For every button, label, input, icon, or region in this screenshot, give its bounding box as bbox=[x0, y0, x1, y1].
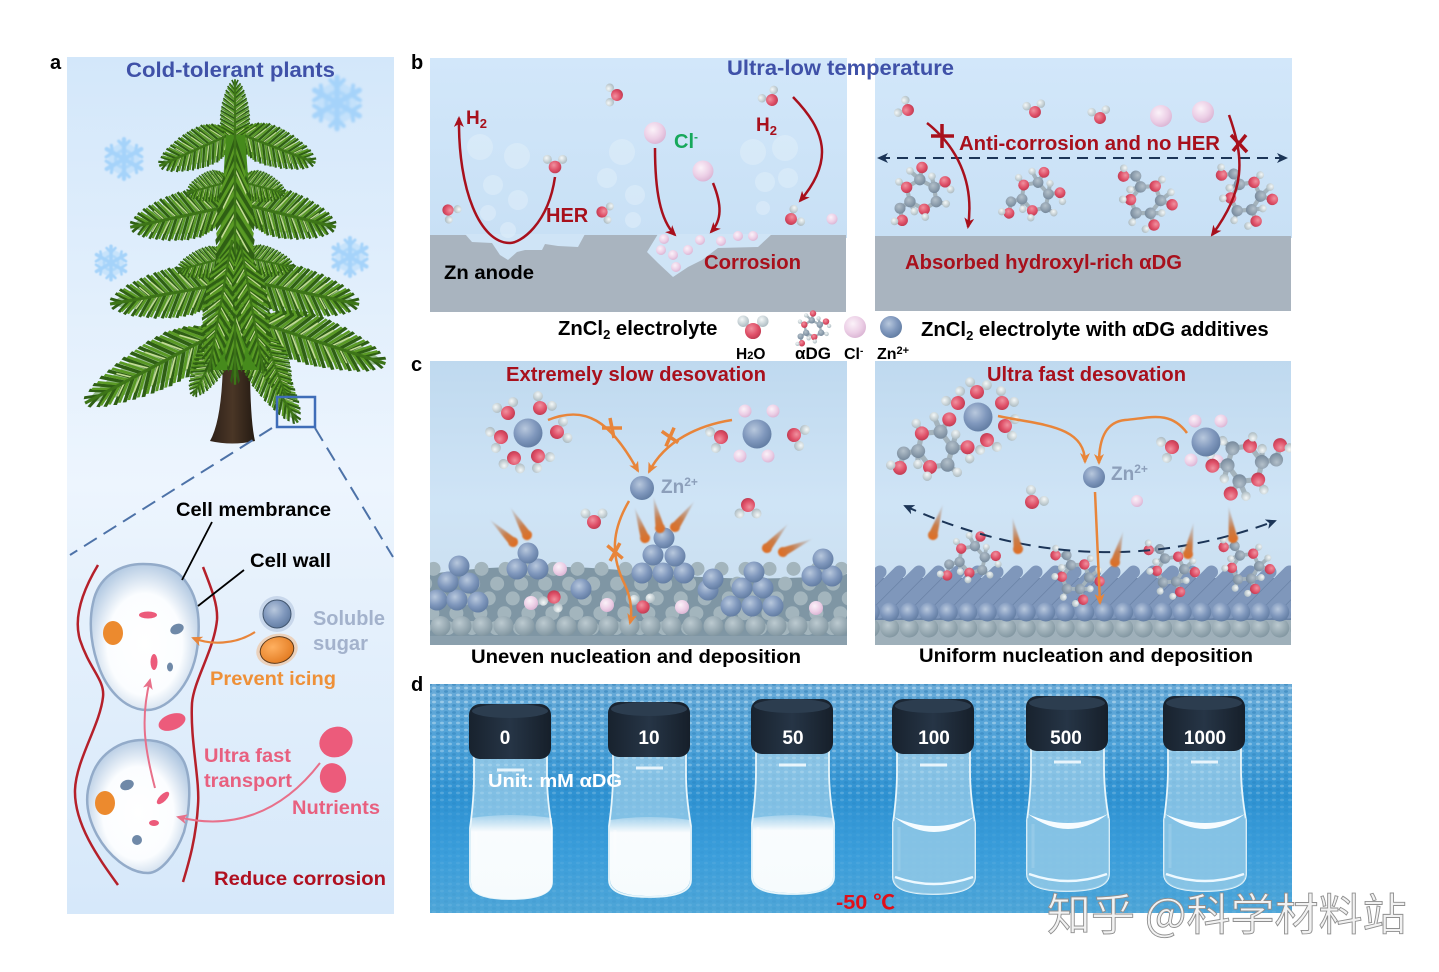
solvated Zn cluster with water bbox=[484, 389, 574, 475]
heading: Ultra-low temperature: Ultra-low temperature bbox=[727, 57, 954, 80]
label: Nutrients: Nutrients bbox=[292, 798, 380, 819]
vial 500 bbox=[1026, 696, 1109, 891]
panel b right: with aDG additive bbox=[875, 58, 1292, 311]
zinc anode with adsorbed layer bbox=[875, 236, 1291, 311]
label: Soluble sugar: Soluble bbox=[313, 608, 385, 630]
vial 0: 0 bbox=[500, 728, 510, 749]
legend: Zn2+: 2+ bbox=[897, 345, 909, 357]
label: Cl-: Cl bbox=[674, 131, 694, 153]
chloride ions bbox=[644, 122, 838, 272]
legend: H2O bbox=[736, 315, 769, 363]
faint bubbles bbox=[467, 134, 798, 238]
label: -50 C: -50 ℃ bbox=[836, 892, 895, 914]
vial 1000 bbox=[1163, 696, 1246, 891]
central Zn ion bbox=[630, 476, 654, 500]
legend bbox=[736, 310, 909, 363]
vial 100 bbox=[892, 699, 975, 894]
panel c left: uneven deposition bbox=[430, 361, 847, 645]
legend: Cl-: - bbox=[860, 346, 863, 357]
label: Cell wall: Cell wall bbox=[250, 551, 331, 572]
label: Absorbed hydroxyl-rich aDG: Absorbed hydroxyl-rich αDG bbox=[905, 252, 1182, 274]
vial 500: 500 bbox=[1050, 728, 1082, 749]
caption: Uniform nucleation and deposition: Uniform nucleation and deposition bbox=[919, 645, 1253, 667]
caption: ZnCl2 electrolyte with aDG additives: 2 bbox=[966, 328, 973, 343]
label: Cl-: - bbox=[694, 130, 698, 144]
label: Cell membrance: Cell membrance bbox=[176, 500, 331, 521]
label: H2 right: H bbox=[756, 115, 770, 136]
dashed guide curve bbox=[905, 506, 1275, 552]
label: Anti-corrosion and no HER: Anti-corrosion and no HER bbox=[959, 133, 1221, 155]
surface chloride and water bbox=[524, 562, 823, 615]
panel letter d: d bbox=[411, 674, 423, 696]
label: H2 right: 2 bbox=[770, 123, 777, 138]
dashed barrier bbox=[879, 157, 1286, 159]
deposited zinc pyramids bbox=[426, 528, 842, 616]
label: Prevent icing: Prevent icing bbox=[210, 669, 336, 690]
corrosion pits bbox=[465, 234, 772, 277]
icon: snowflakes bbox=[96, 77, 367, 280]
adsorbed aDG on surface bbox=[936, 531, 1276, 607]
legend: H2O: H2O bbox=[736, 346, 765, 363]
vial 50: 50 bbox=[782, 728, 804, 749]
label: Unit mM aDG: Unit: mM αDG bbox=[488, 771, 622, 791]
illustration: fir tree bbox=[73, 79, 393, 444]
free water bbox=[580, 498, 762, 529]
central Zn ion bbox=[1083, 466, 1105, 488]
panel b left: ZnCl2 electrolyte bbox=[430, 58, 847, 312]
label: H2 left: H bbox=[466, 108, 480, 129]
orange ion comets bbox=[487, 496, 814, 559]
legend: Zn2+: Zn bbox=[877, 346, 897, 363]
cell wall curves bbox=[75, 565, 217, 885]
orange ion comets bbox=[927, 503, 1239, 568]
title: Ultra fast desovation: Ultra fast desovation bbox=[987, 364, 1186, 386]
legend: Zn2+ bbox=[877, 316, 909, 363]
water and chloride bbox=[892, 94, 1214, 127]
label: Soluble sugar: sugar bbox=[313, 633, 368, 655]
label: Zn2+: 2+ bbox=[684, 475, 698, 489]
legend: aDG: αDG bbox=[795, 344, 831, 363]
upper plant cell bbox=[91, 564, 199, 710]
legend: Cl-: Cl bbox=[844, 346, 860, 363]
arrow: nutrients into cell bbox=[178, 763, 320, 821]
blocked arrows bbox=[927, 115, 1247, 235]
label: H2 left: 2 bbox=[480, 116, 487, 131]
solvated Zn cluster with chloride bbox=[704, 404, 811, 462]
label: Zn2+: 2+ bbox=[1134, 462, 1148, 476]
zinc anode bbox=[430, 235, 846, 312]
leader lines bbox=[182, 522, 244, 606]
panel a: cold-tolerant plants bbox=[50, 52, 394, 914]
panel letter c: c bbox=[411, 354, 422, 376]
panel letter b: b bbox=[411, 52, 423, 74]
vial 1000: 1000 bbox=[1184, 728, 1226, 749]
reaction arrows bbox=[459, 97, 822, 243]
label: Zn anode: Zn anode bbox=[444, 263, 534, 284]
title: Extremely slow desovation: Extremely slow desovation bbox=[506, 364, 766, 386]
desolvation arrows bbox=[998, 416, 1187, 603]
caption: Uneven nucleation and deposition: Uneven nucleation and deposition bbox=[471, 646, 801, 668]
icon: nutrients bbox=[314, 721, 358, 796]
vial 0 bbox=[469, 704, 552, 899]
blocked crosses bbox=[601, 418, 684, 566]
zoom box on branch tip bbox=[277, 397, 315, 427]
vial 10 bbox=[608, 702, 691, 897]
label: Ultra fast transport bbox=[204, 746, 293, 792]
arrow: sugar into cell bbox=[193, 632, 255, 643]
arrow: transport between cells bbox=[145, 680, 155, 788]
vial 100: 100 bbox=[918, 728, 950, 749]
label: Zn2+: Zn bbox=[661, 477, 684, 498]
label: Ultra fast transport: transport bbox=[204, 771, 293, 792]
solvated Zn with water and aDG bbox=[886, 377, 1020, 481]
vial 10: 10 bbox=[638, 728, 660, 749]
legend: aDG bbox=[795, 310, 831, 363]
label: Reduce corrosion: Reduce corrosion bbox=[214, 869, 386, 890]
zoom guide lines bbox=[70, 428, 393, 557]
solvated Zn with chloride and aDG bbox=[1156, 414, 1291, 501]
lower plant cell bbox=[87, 740, 189, 873]
panel d: vial photo bbox=[430, 684, 1292, 914]
panel letter a: a bbox=[50, 52, 62, 74]
watermark: 知乎 @科学材料站 bbox=[1047, 879, 1406, 943]
vial 50 bbox=[751, 699, 834, 894]
heading: Cold-tolerant plants: Cold-tolerant plants bbox=[126, 59, 335, 82]
label: Ultra fast transport: Ultra fast bbox=[204, 746, 292, 767]
legend: Cl- bbox=[844, 316, 866, 363]
pink vesicle between cells bbox=[156, 710, 188, 734]
label: Zn2+: Zn bbox=[1111, 464, 1134, 485]
gray substrate bbox=[400, 566, 866, 645]
caption: ZnCl2 electrolyte with aDG additives: ZnCl bbox=[921, 319, 966, 341]
caption: ZnCl2 electrolyte: electrolyte bbox=[610, 318, 717, 340]
panel c right: uniform deposition bbox=[875, 361, 1291, 645]
zinc rods substrate bbox=[840, 572, 1328, 645]
desolvation arrows bbox=[548, 414, 732, 623]
caption: ZnCl2 electrolyte: 2 bbox=[603, 327, 610, 342]
aDG molecules bbox=[891, 157, 1281, 238]
caption: ZnCl2 electrolyte: ZnCl bbox=[558, 318, 603, 340]
label: HER: HER bbox=[546, 205, 589, 227]
label: Corrosion: Corrosion bbox=[704, 252, 801, 274]
water molecules bbox=[437, 84, 807, 232]
free water and chloride bbox=[1025, 485, 1143, 509]
label: Soluble sugar bbox=[313, 608, 385, 655]
caption: ZnCl2 electrolyte with aDG additives: electrolyte with αDG additives bbox=[973, 319, 1269, 341]
icon: soluble sugar spheres bbox=[253, 596, 301, 671]
